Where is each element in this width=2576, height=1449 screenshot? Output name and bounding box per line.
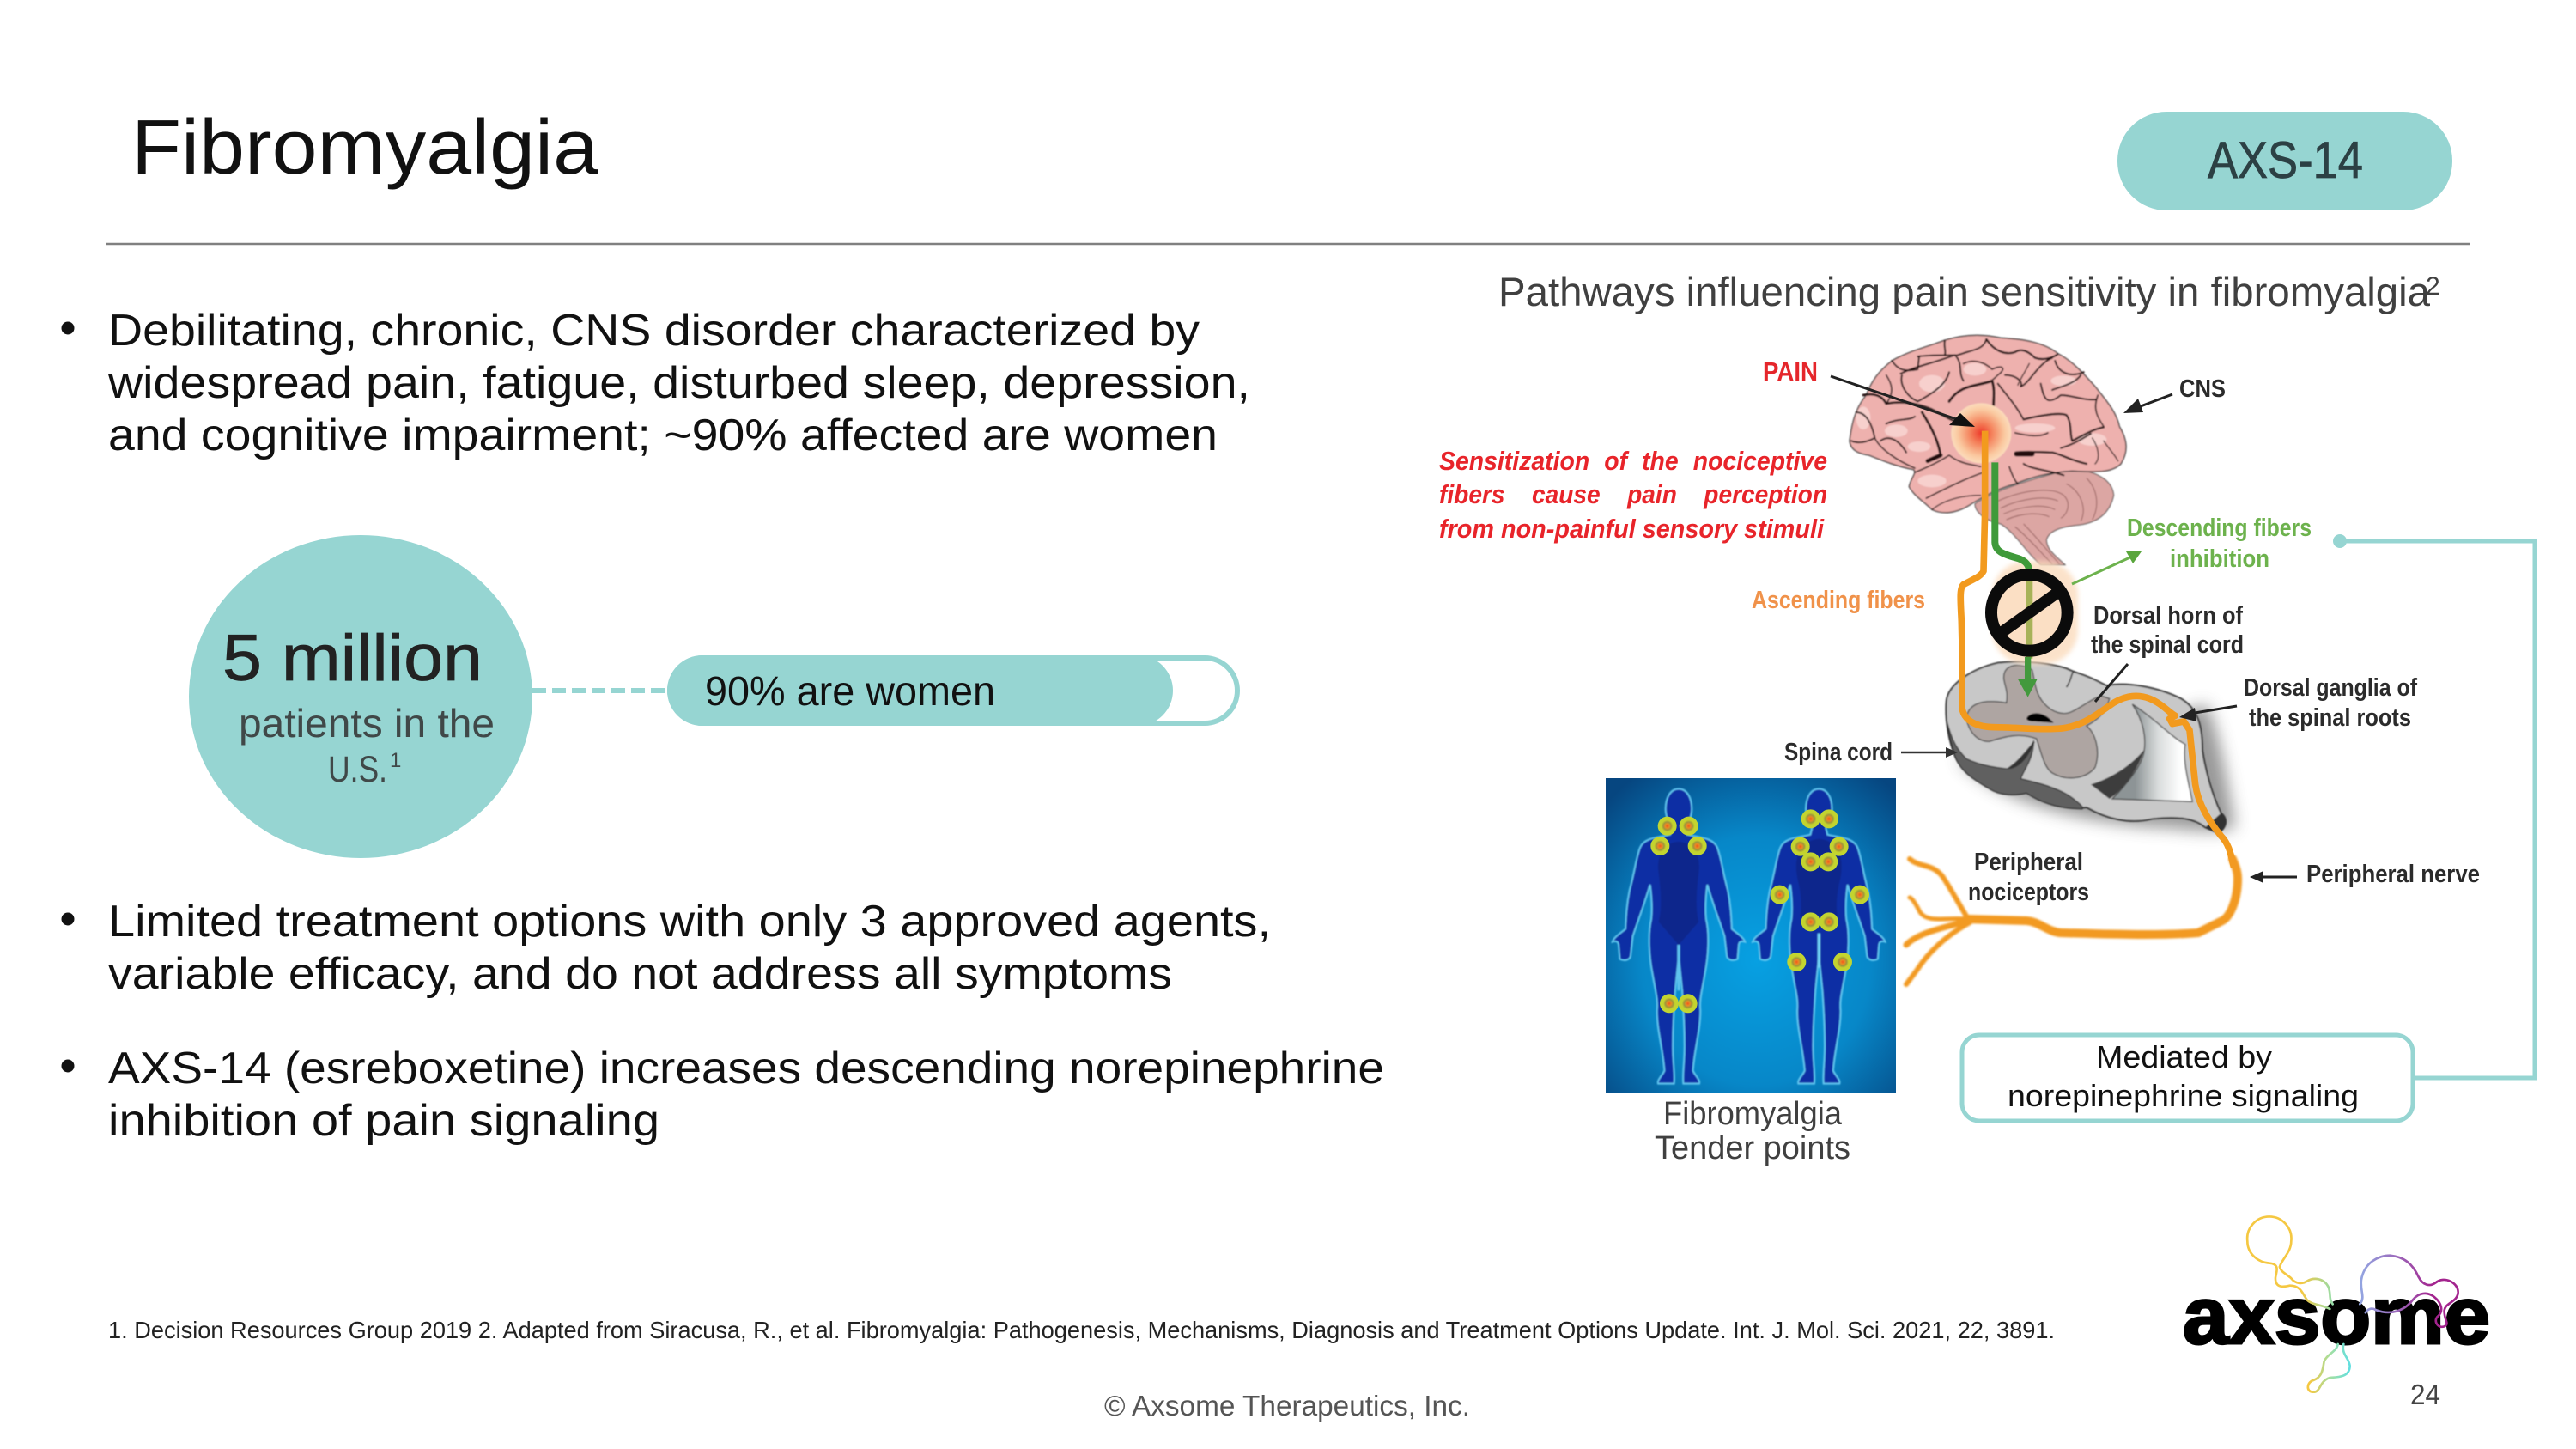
pain glow: [1951, 403, 2011, 463]
badge: AXS-14: AXS-14: [2208, 131, 2363, 189]
label: dorsal horn: Dorsal horn of: [2093, 602, 2243, 630]
peripheral nerve: [1906, 859, 2238, 984]
label: spinal cord: Spina cord: [1784, 739, 1893, 766]
stat circle: 5 million patients: [189, 535, 532, 858]
cerebrum: [1850, 335, 2126, 513]
label: descending fibers inhibition: inhibition: [2170, 545, 2269, 573]
bullet: limited treatment options: [62, 897, 1271, 999]
label: descending fibers inhibition: [2072, 514, 2312, 584]
label: CNS: CNS: [2179, 375, 2226, 403]
tender points: [1650, 809, 1869, 1013]
brain illustration: [1850, 335, 2126, 565]
caption: fibromyalgia tender points: Fibromyalgia: [1663, 1096, 1843, 1132]
title: Fibromyalgia: [131, 105, 599, 191]
progress pill: 90% are women: [667, 655, 1237, 726]
label: dorsal ganglia: Dorsal ganglia of: [2244, 674, 2417, 702]
label: PAIN: [1763, 356, 1975, 427]
badge: AXS-14: [2117, 112, 2452, 210]
caption: fibromyalgia tender points: [1655, 1096, 1850, 1166]
connector: teal line to callout: [2333, 534, 2535, 1078]
bullet: limited treatment options: Limited treatment options with only 3 approved agents,: [108, 897, 1271, 947]
stat circle: 5 million patients: 1: [390, 749, 401, 772]
ascending orange fiber through spinal cord: [1962, 644, 2234, 868]
highlights: [1856, 363, 2106, 487]
label: CNS: [2123, 375, 2226, 413]
spinal cord illustration: [1946, 661, 2235, 833]
label: peripheral nociceptors: [1968, 849, 2089, 906]
back figure: [1753, 788, 1886, 1084]
bullet: AXS-14 mechanism: AXS-14 (esreboxetine) increases descending norepinephrine: [108, 1044, 1384, 1093]
logo: axsome: [2183, 1216, 2490, 1392]
logo: axsome: axsome: [2183, 1270, 2490, 1361]
bullet: disorder description: and cognitive impairment; ~90% affected are women: [108, 411, 1218, 460]
bullet: limited treatment options: variable efficacy, and do not address all symptoms: [108, 949, 1172, 999]
front figure: [1613, 788, 1745, 1084]
connector: dashed line: [532, 688, 668, 693]
label: dorsal horn: [2091, 602, 2244, 702]
footnote: 1. Decision Resources Group 2019 2. Adapted from Siracusa, R., et al. Fibromyalgia: Pathogenesis, Mechanisms, Diagnosis and Treatment Options Update. Int. J. Mol. Sci. 2021, 22, 3891.: [108, 1317, 2055, 1343]
cerebellum and brainstem: [1975, 470, 2114, 565]
bullet: disorder description: [62, 306, 1250, 460]
label: dorsal ganglia: the spinal roots: [2249, 704, 2411, 732]
label: peripheral nerve: [2250, 861, 2480, 888]
stat circle: 5 million patients: patients in the: [239, 701, 495, 746]
label: peripheral nociceptors: nociceptors: [1968, 879, 2089, 906]
label: sensitization note: from non-painful sensory stimuli: [1439, 514, 1825, 544]
callout: mediated by norepinephrine: Mediated by: [2096, 1039, 2272, 1075]
bullet: disorder description: Debilitating, chronic, CNS disorder characterized by: [108, 306, 1200, 356]
label: ascending fibers: Ascending fibers: [1752, 587, 1925, 614]
label: sensitization note: [1439, 446, 1827, 544]
label: peripheral nociceptors: Peripheral: [1974, 849, 2083, 876]
callout: mediated by norepinephrine: [1962, 1035, 2413, 1121]
bullet: disorder description: widespread pain, fatigue, disturbed sleep, depression,: [107, 358, 1250, 408]
descending green fiber: [1995, 462, 2038, 697]
label: PAIN: PAIN: [1763, 356, 1818, 387]
heading: pathways: 2: [2426, 272, 2440, 301]
progress pill: 90% are women: 90% are women: [705, 669, 995, 715]
image: tender points body figures: [1606, 778, 1896, 1093]
label: sensitization note: Sensitization of the nociceptive: [1439, 446, 1827, 476]
label: sensitization note: fibers cause pain perception: [1439, 479, 1827, 509]
callout: mediated by norepinephrine: norepinephrine signaling: [2008, 1078, 2359, 1113]
bullet: AXS-14 mechanism: inhibition of pain signaling: [108, 1096, 659, 1146]
page number: 24: [2410, 1379, 2440, 1410]
label: dorsal ganglia: [2179, 674, 2417, 732]
copyright: © Axsome Therapeutics, Inc.: [1104, 1390, 1470, 1422]
fibers and prohibition sign: [1960, 431, 2078, 697]
caption: fibromyalgia tender points: Tender points: [1655, 1130, 1850, 1166]
prohibition sign: [1991, 575, 2068, 651]
stat circle: 5 million patients: U.S.: [328, 749, 387, 790]
heading: pathways: Pathways influencing pain sensitivity in fibromyalgia: [1498, 269, 2431, 314]
label: dorsal horn: the spinal cord: [2091, 631, 2244, 659]
stat circle: 5 million patients: 5 million: [222, 622, 483, 695]
label: peripheral nerve: Peripheral nerve: [2306, 861, 2480, 888]
diagram: pain pathways: [1439, 335, 2480, 984]
bullet: AXS-14 mechanism: [62, 1044, 1384, 1146]
ascending orange fiber, upper part: [1960, 431, 1985, 646]
label: descending fibers inhibition: Descending fibers: [2127, 514, 2312, 542]
folds: [1851, 339, 2118, 509]
